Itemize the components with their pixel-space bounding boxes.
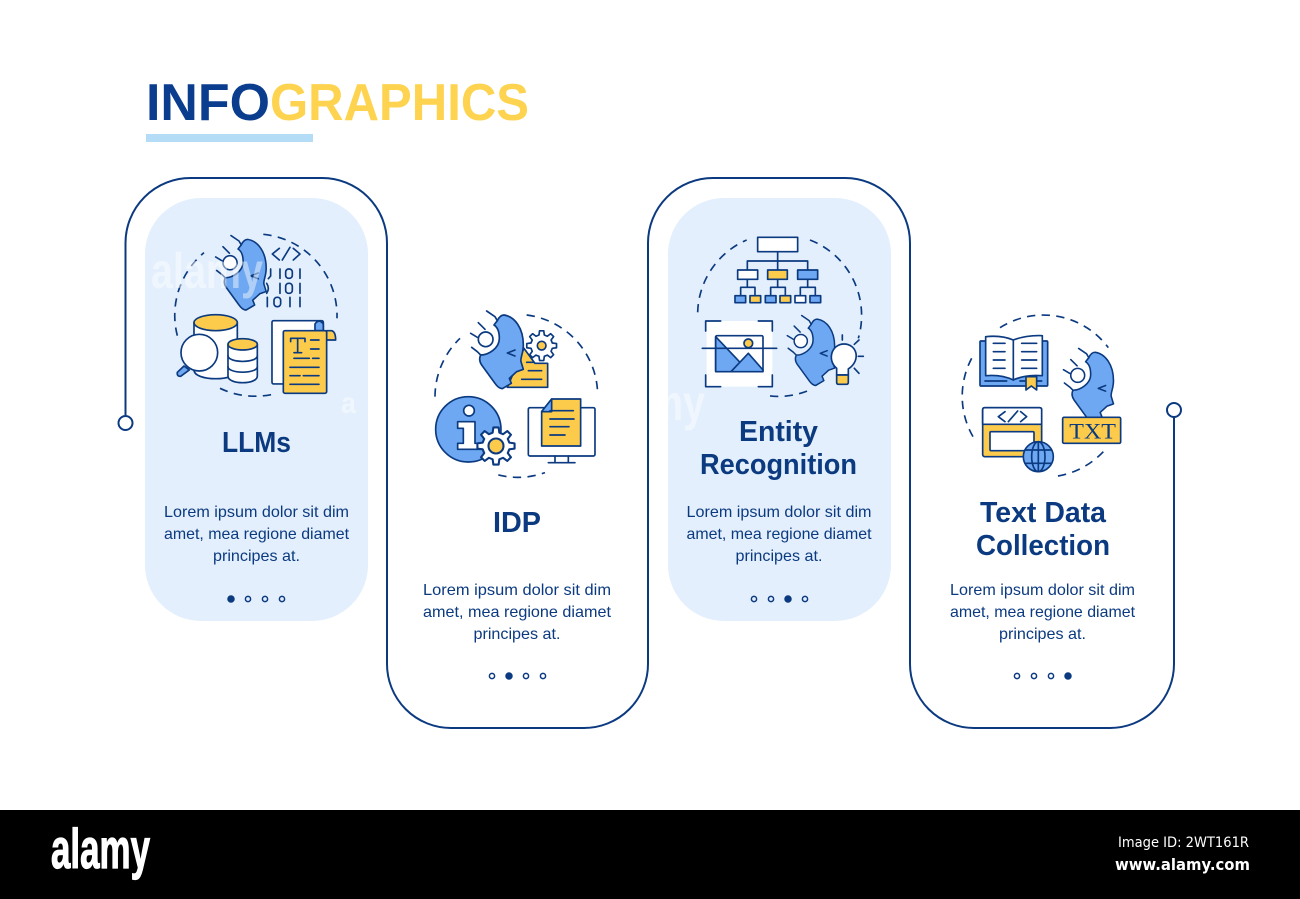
title: INFO <box>146 74 270 132</box>
description: Entity Recognition: amet, mea regione diamet <box>686 526 872 543</box>
description: Entity Recognition <box>686 504 872 565</box>
description: IDP <box>423 582 612 643</box>
icon: Text Data Collection: TXT <box>1069 419 1117 444</box>
description: IDP: Lorem ipsum dolor sit dim <box>423 582 611 599</box>
heading: Text Data Collection <box>976 497 1110 562</box>
light panel: Entity Recognition <box>668 198 891 621</box>
faint watermark <box>151 243 705 431</box>
description: Entity Recognition: principes at. <box>736 548 822 565</box>
description: Text Data Collection: Lorem ipsum dolor sit dim <box>950 582 1135 599</box>
heading: LLMs: LLMs <box>222 427 291 459</box>
heading: Entity Recognition: Recognition <box>700 449 857 481</box>
heading: IDP: IDP <box>493 507 541 539</box>
page dots: Entity Recognition <box>751 596 808 602</box>
heading: Entity Recognition: Entity <box>739 416 818 448</box>
page dots: LLMs <box>228 596 285 602</box>
heading: Text Data Collection: Collection <box>976 530 1110 562</box>
description: Text Data Collection: principes at. <box>999 626 1086 643</box>
heading: Entity Recognition <box>700 416 857 481</box>
faint watermark: my <box>648 375 705 431</box>
description: Text Data Collection <box>950 582 1136 643</box>
description: LLMs: Lorem ipsum dolor sit dim <box>164 504 349 521</box>
footer bar: alamy <box>51 817 150 880</box>
title underline <box>146 134 313 142</box>
description: IDP: principes at. <box>474 626 560 643</box>
light panel: LLMs <box>145 198 368 621</box>
faint watermark: alamy <box>151 243 263 299</box>
description: IDP: amet, mea regione diamet <box>423 604 612 621</box>
footer bar: www.alamy.com <box>1115 855 1250 874</box>
description: LLMs: amet, mea regione diamet <box>164 526 350 543</box>
faint watermark: a <box>341 387 356 420</box>
icon: LLMs <box>175 234 337 396</box>
title <box>146 74 529 132</box>
description: Text Data Collection: amet, mea regione diamet <box>950 604 1136 621</box>
page dots: Text Data Collection <box>1014 673 1071 679</box>
icon: Entity Recognition <box>698 237 863 396</box>
footer bar: Image ID: 2WT161R <box>1118 835 1249 851</box>
footer bar <box>0 810 1300 899</box>
description: LLMs: principes at. <box>213 548 300 565</box>
icon: IDP <box>435 311 598 477</box>
title: GRAPHICS <box>270 74 529 132</box>
heading: Text Data Collection: Text Data <box>980 497 1107 529</box>
icon: Text Data Collection <box>962 315 1121 477</box>
page dots: IDP <box>489 673 546 679</box>
serpentine outline connector <box>118 178 1181 728</box>
description: Entity Recognition: Lorem ipsum dolor sit dim <box>686 504 872 521</box>
description: LLMs <box>164 504 350 565</box>
